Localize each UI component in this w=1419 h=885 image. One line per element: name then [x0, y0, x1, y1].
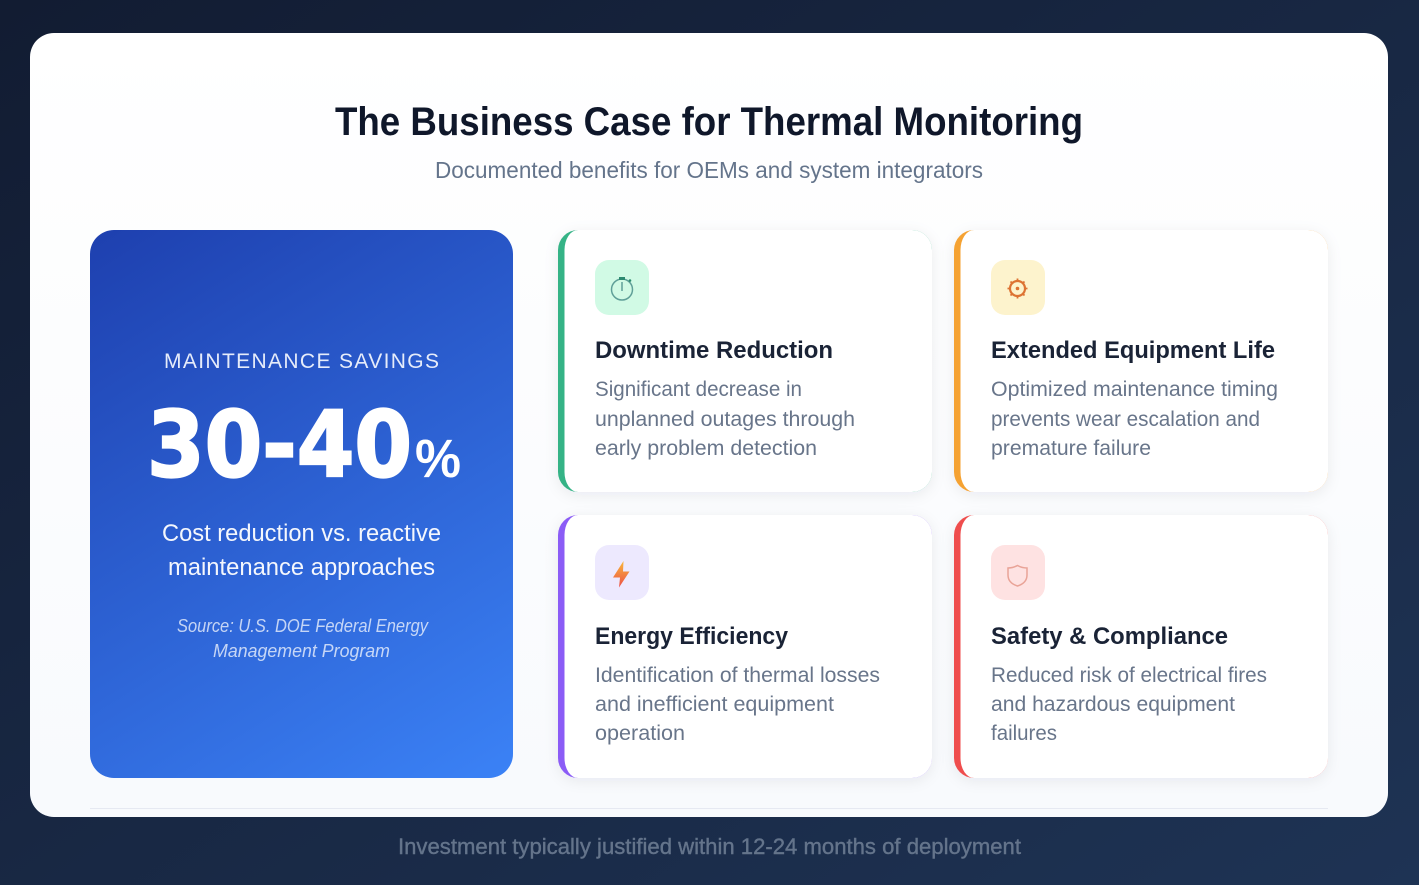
icon: shield — [991, 545, 1045, 600]
savings source: Management Program — [213, 640, 390, 661]
savings source — [177, 615, 430, 661]
savings description: Cost reduction vs. reactive — [162, 520, 441, 547]
savings figure: % — [415, 429, 461, 489]
description — [595, 663, 880, 745]
savings description — [162, 520, 441, 581]
savings description: maintenance approaches — [168, 554, 435, 581]
description: Identification of thermal losses — [595, 663, 880, 687]
panel: safety and compliance — [954, 515, 1328, 778]
heading: Safety & Compliance — [991, 623, 1228, 650]
panel: maintenance savings — [90, 230, 513, 778]
subtitle: Documented benefits for OEMs and system integrators — [435, 157, 983, 183]
description: Reduced risk of electrical fires — [991, 663, 1267, 687]
description — [991, 377, 1278, 460]
description: unplanned outages through — [595, 407, 855, 431]
description: and inefficient equipment — [595, 692, 834, 716]
description: Significant decrease in — [595, 377, 802, 401]
panel: downtime reduction — [558, 230, 932, 492]
footer note: Investment typically justified within 12-24 months of deployment — [398, 834, 1021, 859]
panel: extended equipment life — [954, 230, 1328, 492]
savings label: MAINTENANCE SAVINGS — [164, 350, 439, 373]
heading: Extended Equipment Life — [991, 337, 1275, 364]
icon: stopwatch — [595, 260, 649, 315]
heading: Downtime Reduction — [595, 337, 833, 364]
description: operation — [595, 721, 685, 745]
title: The Business Case for Thermal Monitoring — [335, 100, 1083, 144]
icon: lightning bolt — [595, 545, 649, 600]
description — [991, 663, 1267, 745]
description: Optimized maintenance timing — [991, 377, 1278, 401]
savings figure: 30-40 — [147, 393, 412, 498]
description: prevents wear escalation and — [991, 407, 1260, 431]
icon: gear — [991, 260, 1045, 315]
savings source: Source: U.S. DOE Federal Energy — [177, 615, 430, 636]
description: premature failure — [991, 436, 1151, 460]
panel: energy efficiency — [558, 515, 932, 778]
description — [595, 377, 855, 460]
description: early problem detection — [595, 436, 817, 460]
description: failures — [991, 721, 1057, 745]
description: and hazardous equipment — [991, 692, 1235, 716]
heading: Energy Efficiency — [595, 623, 789, 650]
